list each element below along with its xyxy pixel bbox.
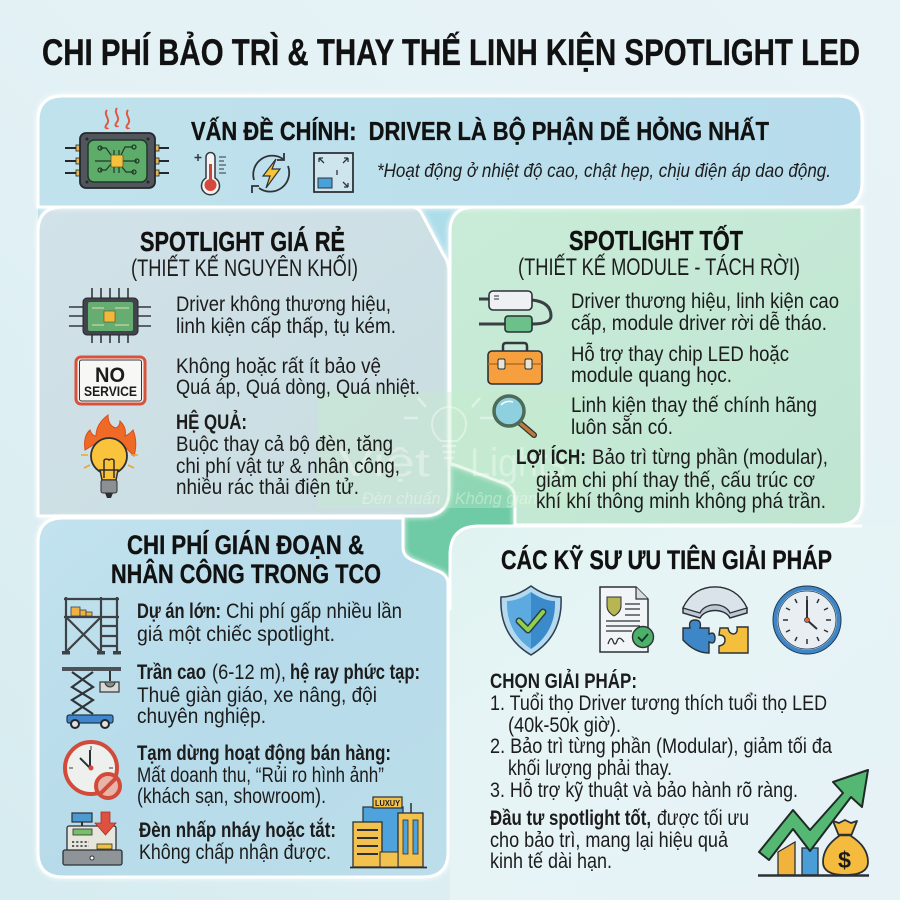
icon: luxury buildings: LUXUY bbox=[375, 799, 401, 808]
heading: cheap spotlight: SPOTLIGHT GIÁ RẺ bbox=[140, 225, 345, 257]
text: benefits: LỢI ÍCH: bbox=[516, 446, 586, 469]
backdrop behind comparison panels bbox=[38, 150, 470, 300]
text: high ceiling: Thuê giàn giáo, xe nâng, đội bbox=[137, 684, 377, 707]
text: consequences: Buộc thay cả bộ đèn, tăng bbox=[176, 433, 393, 456]
text: driver quality: Driver không thương hiệu, bbox=[176, 293, 391, 316]
text: flickering lights: Không chấp nhận được. bbox=[139, 841, 331, 864]
panel: main issue bbox=[38, 96, 862, 207]
text: protection bbox=[176, 355, 420, 399]
text: driver quality bbox=[176, 293, 396, 338]
text: invest in good spotlights: cho bảo trì, mang lại hiệu quả bbox=[490, 829, 728, 852]
watermark: Đèn chuẩn - Không gian bbox=[362, 489, 537, 508]
icon: magnifier bbox=[494, 396, 534, 435]
panel: downtime and labour costs bbox=[38, 518, 448, 877]
text: high ceiling: Trần cao bbox=[137, 661, 206, 684]
heading: downtime costs: CHI PHÍ GIÁN ĐOẠN & bbox=[127, 529, 364, 560]
text: sales suspended: Mất doanh thu, “Rủi ro hình ảnh” bbox=[137, 764, 384, 787]
text: genuine parts: luôn sẵn có. bbox=[571, 416, 673, 439]
text: large project: Dự án lớn: bbox=[137, 600, 221, 623]
icon: shield bbox=[501, 586, 561, 655]
text: choosing a solution: CHỌN GIẢI PHÁP: bbox=[490, 670, 637, 693]
text: choosing a solution: 2. Bảo trì từng phần (Modular), giảm tối đa bbox=[490, 735, 832, 758]
text: consequences: HỆ QUẢ: bbox=[176, 410, 247, 434]
subheading: cheap spotlight: (THIẾT KẾ NGUYÊN KHỐI) bbox=[131, 254, 358, 282]
icon: stopped clock bbox=[65, 742, 120, 798]
text: benefits: khí khí thông minh không phá trần. bbox=[536, 490, 826, 513]
icon: voltage fluctuation bbox=[252, 153, 289, 193]
text: replace chip bbox=[571, 343, 789, 387]
text: flickering lights bbox=[139, 818, 336, 864]
text: driver quality: linh kiện cấp thấp, tụ kém. bbox=[176, 315, 396, 338]
centre connector shape bbox=[396, 462, 520, 580]
icon: cash register bbox=[63, 812, 122, 865]
icon: no service sign: SERVICE bbox=[84, 383, 137, 399]
icon: hot driver chip bbox=[65, 108, 169, 188]
note: operating conditions: *Hoạt động ở nhiệt độ cao, chật hẹp, chịu điện áp dao động. bbox=[377, 161, 831, 182]
watermark: Việt bbox=[338, 441, 430, 485]
text: flickering lights: Đèn nhấp nháy hoặc tắt: bbox=[139, 818, 336, 842]
text: large project bbox=[137, 600, 402, 646]
heading: main issue: VẤN ĐỀ CHÍNH: DRIVER LÀ BỘ PHẬN DỄ HỎNG NHẤT bbox=[191, 115, 769, 146]
text: protection: Không hoặc rất ít bảo vệ bbox=[176, 355, 381, 378]
text: sales suspended bbox=[137, 742, 391, 808]
watermark: Lights bbox=[470, 441, 566, 485]
icon: burning bulb bbox=[81, 415, 138, 498]
text: large project: Chi phí gấp nhiều lần bbox=[226, 600, 402, 623]
text: sales suspended: (khách sạn, showroom). bbox=[137, 785, 326, 808]
text: choosing a solution: 3. Hỗ trợ kỹ thuật và bảo hành rõ ràng. bbox=[490, 779, 798, 802]
icon: driver module bbox=[479, 291, 551, 332]
icon: thermometer bbox=[194, 152, 226, 195]
watermark bbox=[318, 392, 582, 508]
heading: good spotlight: SPOTLIGHT TỐT bbox=[569, 224, 743, 256]
text: sales suspended: Tạm dừng hoạt động bán hàng: bbox=[137, 742, 391, 765]
icon: luxury buildings bbox=[350, 797, 427, 868]
text: branded driver: Driver thương hiệu, linh kiện cao bbox=[571, 290, 839, 313]
icon: growth chart with money bag bbox=[758, 770, 869, 876]
text: benefits: giảm chi phí thay thế, cấu trúc cơ bbox=[536, 469, 815, 492]
text: replace chip: Hỗ trợ thay chip LED hoặc bbox=[571, 343, 789, 366]
panel: good spotlight bbox=[450, 207, 862, 525]
text: large project: giá một chiếc spotlight. bbox=[137, 623, 335, 646]
text: benefits: Bảo trì từng phần (modular), bbox=[592, 446, 828, 469]
icon: no service sign bbox=[76, 357, 145, 404]
text: invest in good spotlights: Đầu tư spotlight tốt, bbox=[490, 807, 651, 830]
text: branded driver: cấp, module driver rời dễ tháo. bbox=[571, 312, 827, 335]
heading: downtime costs: NHÂN CÔNG TRONG TCO bbox=[111, 558, 381, 589]
text: high ceiling: chuyên nghiệp. bbox=[137, 705, 266, 728]
icon: scissor lift bbox=[62, 667, 121, 728]
text: invest in good spotlights: được tối ưu bbox=[657, 807, 749, 830]
icon: clock bbox=[773, 586, 841, 654]
text: invest in good spotlights: kinh tế dài hạn. bbox=[490, 850, 612, 873]
text: high ceiling: (6-12 m), bbox=[212, 661, 286, 684]
text: genuine parts bbox=[571, 394, 817, 439]
subheading: good spotlight: (THIẾT KẾ MODULE - TÁCH RỜI) bbox=[518, 253, 800, 281]
icon: growth chart with money bag: $ bbox=[838, 847, 851, 873]
text: genuine parts: Linh kiện thay thế chính hãng bbox=[571, 394, 817, 417]
text: benefits bbox=[516, 446, 828, 513]
panel: engineers' priorities bbox=[450, 526, 900, 900]
text: choosing a solution: (40k-50k giờ). bbox=[508, 714, 621, 737]
text: protection: Quá áp, Quá dòng, Quá nhiệt. bbox=[176, 376, 420, 399]
text: choosing a solution bbox=[490, 670, 832, 802]
text: choosing a solution: khối lượng phải thay. bbox=[508, 757, 672, 780]
text: consequences: chi phí vật tư & nhân công, bbox=[176, 455, 400, 478]
icon: modular puzzle bbox=[683, 587, 748, 653]
heading: downtime costs bbox=[111, 529, 381, 589]
text: choosing a solution: 1. Tuổi thọ Driver tương thích tuổi thọ LED bbox=[490, 692, 827, 715]
icon: warranty document bbox=[600, 587, 654, 652]
text: consequences: nhiều rác thải điện tử. bbox=[176, 476, 359, 499]
icon: no service sign: NO bbox=[95, 364, 125, 387]
icon: toolbox bbox=[488, 343, 542, 384]
icon: tight space bbox=[314, 153, 353, 192]
panel: cheap spotlight bbox=[38, 207, 449, 516]
text: high ceiling: hệ ray phức tạp: bbox=[290, 661, 420, 684]
text: branded driver bbox=[571, 290, 839, 335]
icon: low grade chip bbox=[69, 288, 151, 343]
text: consequences bbox=[176, 410, 400, 499]
icon: scaffolding bbox=[62, 597, 121, 654]
text: invest in good spotlights bbox=[490, 807, 749, 873]
text: high ceiling bbox=[137, 661, 420, 728]
text: replace chip: module quang học. bbox=[571, 364, 732, 387]
